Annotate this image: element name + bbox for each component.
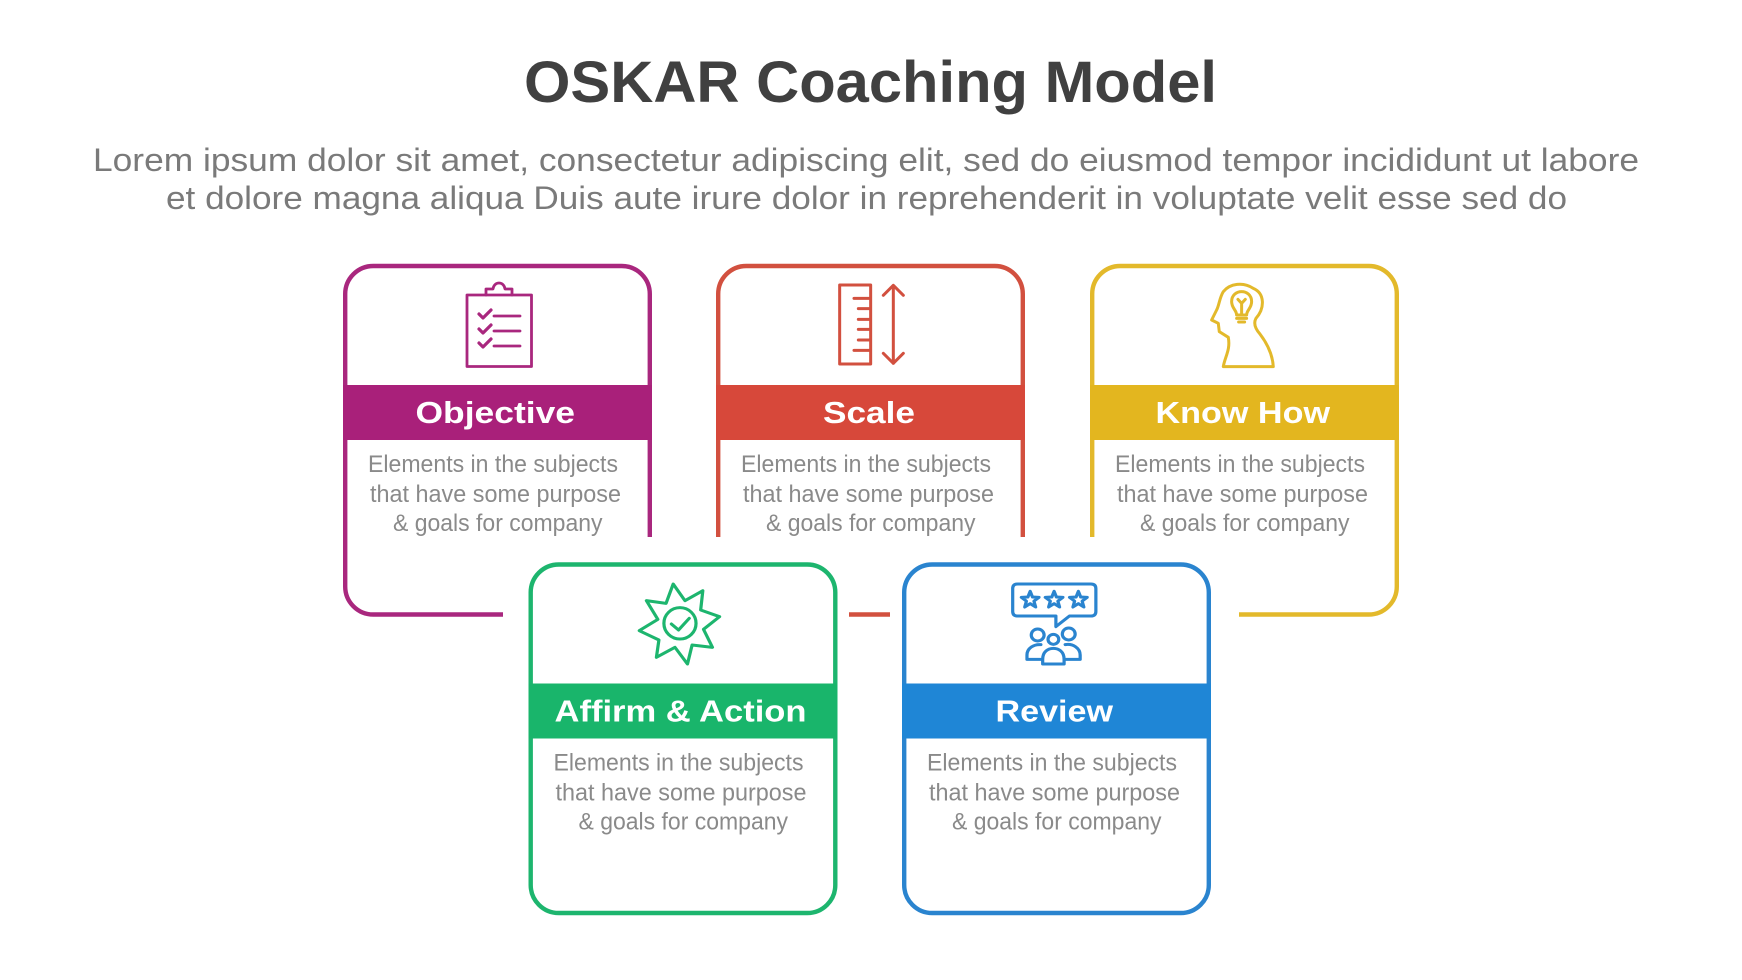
subtitle text: et dolore magna aliqua Duis aute irure dolor in reprehenderit in voluptate velit esse sed do <box>166 180 1567 216</box>
description: Review: Elements in the subjects <box>927 750 1177 776</box>
panel: Affirm & Action <box>528 564 838 913</box>
connector segment: Scale <box>849 612 890 617</box>
description: Objective: that have some purpose <box>370 481 621 508</box>
icon: ruler and arrow <box>840 285 903 364</box>
description: Affirm & Action: Elements in the subjects <box>554 750 804 776</box>
description: Objective <box>368 451 621 537</box>
description: Scale <box>741 451 994 537</box>
heading: Review: Review <box>996 694 1114 728</box>
description: Review: & goals for company <box>952 808 1162 836</box>
description: Objective: Elements in the subjects <box>368 451 618 478</box>
panel: Know How <box>1090 266 1399 614</box>
card outline: Review <box>904 564 1209 913</box>
heading band: Know How <box>1090 385 1399 440</box>
description: Review <box>927 750 1180 836</box>
heading: Objective: Objective <box>416 395 575 430</box>
description: Know How: that have some purpose <box>1117 481 1368 508</box>
panel: Review <box>902 564 1211 913</box>
description: Review: that have some purpose <box>929 780 1180 806</box>
heading band: Review <box>902 684 1211 738</box>
description: Affirm & Action: & goals for company <box>578 808 789 836</box>
title: OSKAR Coaching Model <box>524 50 1217 115</box>
description: Objective: & goals for company <box>393 510 603 537</box>
heading: Affirm & Action: Affirm & Action <box>554 694 806 728</box>
heading: Know How: Know How <box>1156 395 1331 430</box>
card outline: Objective <box>345 266 650 614</box>
card outline: Affirm & Action <box>531 564 835 913</box>
panel: Scale <box>716 266 1025 614</box>
description: Know How: Elements in the subjects <box>1115 451 1365 478</box>
icon: badge with check <box>639 584 720 664</box>
heading band: Scale <box>716 385 1025 440</box>
heading band: Affirm & Action <box>528 684 838 738</box>
icon: head with light bulb <box>1212 284 1273 367</box>
panel: Objective <box>343 266 652 614</box>
description: Affirm & Action: that have some purpose <box>556 780 806 806</box>
heading band: Objective <box>343 385 652 440</box>
subtitle text: Lorem ipsum dolor sit amet, consectetur adipiscing elit, sed do eiusmod tempor incididunt ut labore <box>93 142 1639 178</box>
description: Scale: Elements in the subjects <box>741 451 991 478</box>
subtitle text <box>93 142 1639 216</box>
description: Affirm & Action <box>554 750 806 836</box>
description: Scale: that have some purpose <box>743 481 994 508</box>
description: Know How <box>1115 451 1368 537</box>
heading: Scale: Scale <box>823 395 915 430</box>
description: Scale: & goals for company <box>766 510 976 537</box>
card outline: Scale <box>718 266 1023 537</box>
icon: clipboard checklist <box>467 283 532 366</box>
card outline: Know How <box>1092 266 1397 614</box>
icon: rating stars and people <box>1013 584 1096 664</box>
description: Know How: & goals for company <box>1140 510 1350 537</box>
